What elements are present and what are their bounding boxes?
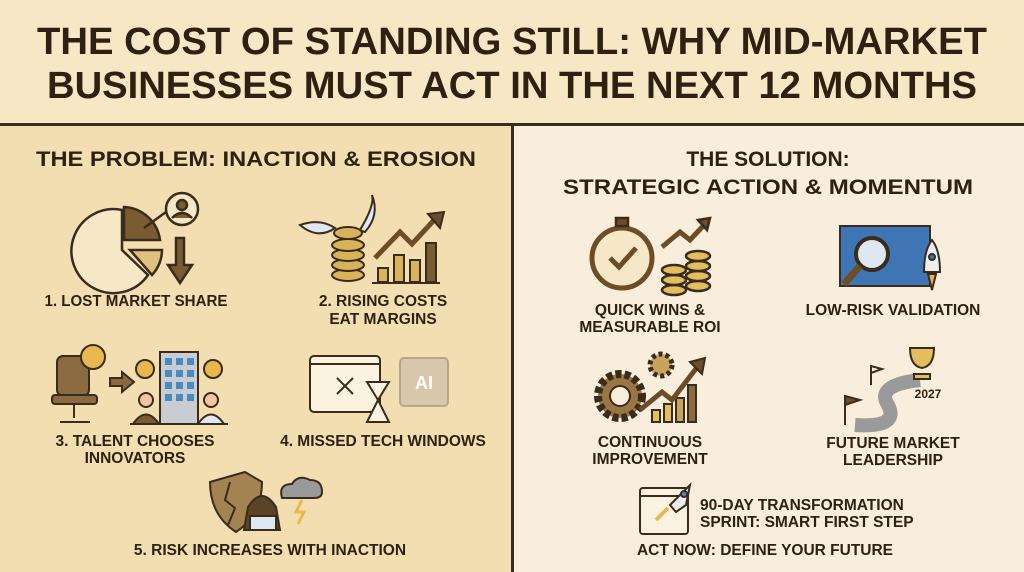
title: THE COST OF STANDING STILL: WHY MID-MARKET (37, 21, 987, 63)
label: continuous improvement (592, 434, 708, 468)
icon: quick wins (592, 218, 710, 295)
text: sprint: 90-DAY TRANSFORMATION (700, 497, 904, 514)
label: rising costs: 2. RISING COSTS (319, 293, 447, 310)
icon: validation (840, 226, 940, 290)
label: lost market share: 1. LOST MARKET SHARE (44, 293, 228, 310)
heading: solution (563, 148, 973, 199)
label: future leadership: FUTURE MARKET (826, 435, 960, 452)
icon: future leadership (845, 348, 942, 425)
label: talent: INNOVATORS (85, 450, 185, 467)
icon: sprint rocket (640, 485, 690, 534)
label: future leadership: LEADERSHIP (843, 452, 943, 469)
label: rising costs: EAT MARGINS (329, 311, 437, 328)
icon: missed tech: AI (415, 373, 433, 393)
label: quick wins: QUICK WINS & (595, 302, 705, 319)
title: BUSINESSES MUST ACT IN THE NEXT 12 MONTHS (47, 65, 977, 107)
label: continuous improvement: CONTINUOUS (598, 434, 702, 451)
icon: lost market share (71, 193, 198, 293)
icon: talent (52, 345, 228, 424)
label: missed tech: 4. MISSED TECH WINDOWS (280, 433, 486, 450)
heading: solution: STRATEGIC ACTION & MOMENTUM (563, 176, 973, 199)
panel: solution (563, 148, 980, 559)
label: talent (55, 433, 215, 467)
heading: problem: THE PROBLEM: INACTION & EROSION (36, 148, 476, 171)
label: risk: 5. RISK INCREASES WITH INACTION (134, 542, 406, 559)
icon: risk (210, 472, 322, 532)
label: validation: LOW-RISK VALIDATION (806, 302, 980, 319)
text: call to action: ACT NOW: DEFINE YOUR FUTURE (637, 542, 893, 559)
panel: problem (36, 148, 486, 559)
icon: continuous improvement (598, 354, 705, 422)
label: quick wins (579, 302, 721, 336)
icon: rising costs (300, 195, 444, 283)
heading: solution: THE SOLUTION: (686, 148, 850, 171)
text: sprint (700, 497, 914, 531)
label: quick wins: MEASURABLE ROI (579, 319, 721, 336)
title (37, 21, 987, 107)
label: continuous improvement: IMPROVEMENT (592, 451, 708, 468)
text: sprint: SPRINT: SMART FIRST STEP (700, 514, 914, 531)
icon: missed tech (310, 356, 448, 422)
label: rising costs (319, 293, 447, 328)
icon: future leadership: 2027 (915, 387, 942, 401)
label: talent: 3. TALENT CHOOSES (55, 433, 215, 450)
label: future leadership (826, 435, 960, 469)
